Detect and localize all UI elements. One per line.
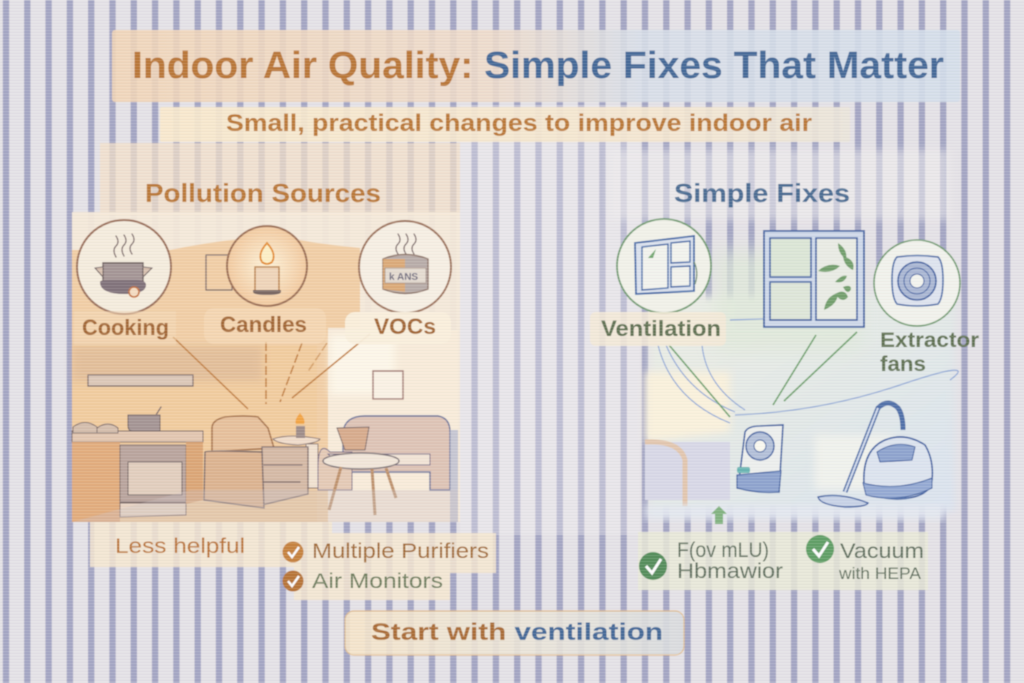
pointer lines: simple fixes <box>669 332 857 417</box>
icon: VOCs: k ANS <box>389 272 418 283</box>
kitchen counter and oven <box>72 407 203 522</box>
range hood <box>88 375 193 386</box>
pollution sources heading: Pollution Sources <box>145 178 381 208</box>
panel: simple fixes <box>590 150 979 524</box>
illustration: air purifier <box>737 425 783 492</box>
label: extractor fans: fans <box>880 353 926 376</box>
callout: start with ventilation <box>345 611 684 655</box>
panel: title banner <box>112 30 960 102</box>
item: vacuum with HEPA <box>806 535 924 583</box>
panel: less helpful <box>90 522 496 600</box>
subtitle: Small, practical changes to improve indoor air <box>226 110 812 137</box>
illustration: large window <box>764 231 864 327</box>
label pill: candles: Candles <box>220 312 307 337</box>
item: airflow behavior <box>639 539 783 583</box>
item: airflow behavior: F(ov mLU) <box>677 539 769 562</box>
label pill: candles <box>204 308 326 344</box>
item: air monitors <box>282 570 443 593</box>
callout: start with ventilation: Start with ventilation <box>371 619 663 646</box>
item: multiple purifiers: Multiple Purifiers <box>312 540 489 563</box>
icon: VOCs <box>359 221 451 313</box>
leaves <box>818 243 854 310</box>
side table and candle <box>273 413 320 488</box>
airflow curves <box>658 318 958 423</box>
panel: subtitle <box>160 107 850 142</box>
armchair <box>204 416 308 508</box>
less helpful label: Less helpful <box>115 535 245 558</box>
panel: helpful actions <box>638 532 928 590</box>
label pill: cooking <box>74 311 176 345</box>
label pill: cooking: Cooking <box>82 315 169 340</box>
illustration: ventilated room <box>645 250 958 520</box>
pointer lines: pollution sources <box>173 334 370 409</box>
icon: candles <box>227 226 307 306</box>
icon: cooking <box>77 220 171 314</box>
sofa <box>318 416 458 522</box>
item: vacuum with HEPA: Vacuum <box>840 540 924 563</box>
wall frame left <box>206 255 232 290</box>
label: ventilation <box>590 312 726 346</box>
label: extractor fans: Extractor <box>880 329 979 352</box>
item: air monitors: Air Monitors <box>312 570 443 593</box>
coffee table <box>323 453 399 515</box>
simple fixes heading: Simple Fixes <box>674 178 850 208</box>
icon: green up arrow <box>711 506 727 524</box>
panel: pollution sources <box>72 143 460 522</box>
title: Indoor Air Quality: Simple Fixes That Matter <box>132 45 944 87</box>
item: vacuum with HEPA: with HEPA <box>838 564 922 583</box>
label: extractor fans <box>880 329 979 376</box>
label pill: VOCs <box>345 312 451 344</box>
label pill: VOCs: VOCs <box>374 314 436 339</box>
icon: extractor fan <box>874 240 960 326</box>
item: airflow behavior: Hbmawior <box>677 560 783 583</box>
label: ventilation: Ventilation <box>601 316 721 341</box>
icon: ventilation window <box>617 219 711 313</box>
illustration: vacuum cleaner <box>818 403 932 507</box>
illustration: living room and kitchen <box>72 212 460 522</box>
